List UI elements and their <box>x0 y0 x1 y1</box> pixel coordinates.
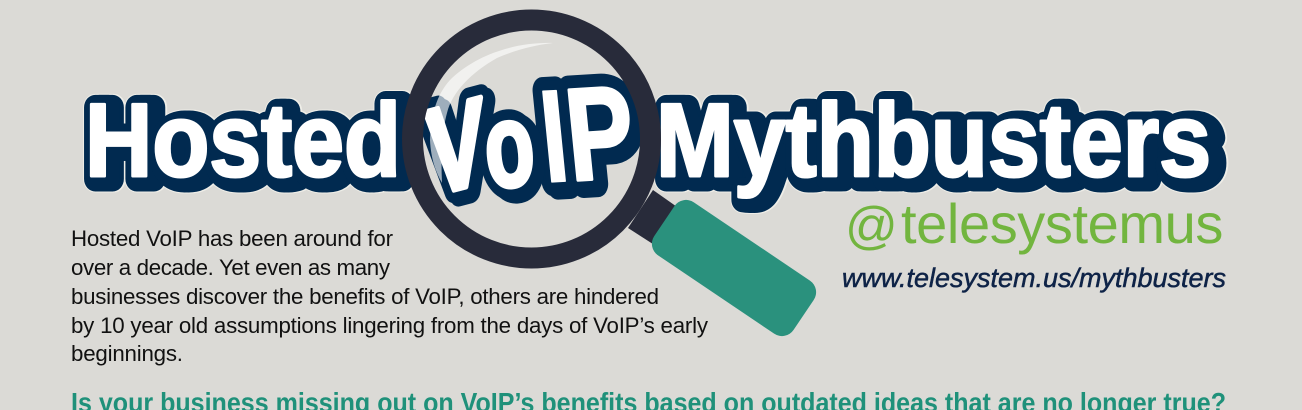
VoIP navy outline: P <box>564 61 645 212</box>
VoIP white letters: I <box>534 63 574 211</box>
twitter handle: telesystemus <box>901 192 1223 255</box>
intro paragraph: Hosted VoIP has been around for <box>71 226 394 251</box>
lens background <box>420 27 644 251</box>
VoIP navy outline: V <box>422 72 491 222</box>
magnifying glass handle <box>646 194 822 342</box>
title: Hosted: Hosted <box>89 86 405 202</box>
intro paragraph: businesses discover the benefits of VoIP, others are hindered <box>71 284 659 309</box>
website url: www.telesystem.us/mythbusters <box>842 263 1226 293</box>
VoIP white letters: V <box>422 72 491 222</box>
title: Hosted: Hosted <box>93 86 409 202</box>
title: Mythbusters: Mythbusters <box>660 86 1215 202</box>
VoIP navy outline: I <box>539 67 579 214</box>
lens highlight <box>430 43 553 183</box>
VoIP navy outline: P <box>559 58 640 208</box>
title: Mythbusters: Mythbusters <box>660 86 1215 202</box>
magnifying glass handle neck <box>628 190 680 246</box>
VoIP navy outline <box>423 74 640 207</box>
VoIP white letters: P <box>559 58 640 208</box>
title: Hosted: Hosted <box>85 83 401 199</box>
VoIP navy outline: o <box>484 81 544 217</box>
VoIP white letters <box>424 86 630 193</box>
magnifying glass ring <box>412 20 650 258</box>
title: Hosted: Hosted <box>94 86 410 202</box>
twitter handle: @ <box>845 197 898 255</box>
intro paragraph: over a decade. Yet even as many <box>71 255 391 280</box>
VoIP navy outline: o <box>479 78 539 214</box>
VoIP navy outline: V <box>427 76 496 225</box>
intro paragraph <box>71 226 709 366</box>
intro paragraph: beginnings. <box>71 341 183 366</box>
title: Mythbusters: Mythbusters <box>656 83 1211 199</box>
intro paragraph: by 10 year old assumptions lingering from the days of VoIP’s early <box>71 313 709 338</box>
title: VoIP magnified <box>423 43 640 207</box>
title: Mythbusters: Mythbusters <box>664 86 1219 202</box>
title: Mythbusters: Mythbusters <box>665 86 1220 202</box>
VoIP navy outline: I <box>534 63 574 211</box>
title: Hosted: Hosted <box>89 86 405 202</box>
VoIP white letters: o <box>479 78 539 214</box>
